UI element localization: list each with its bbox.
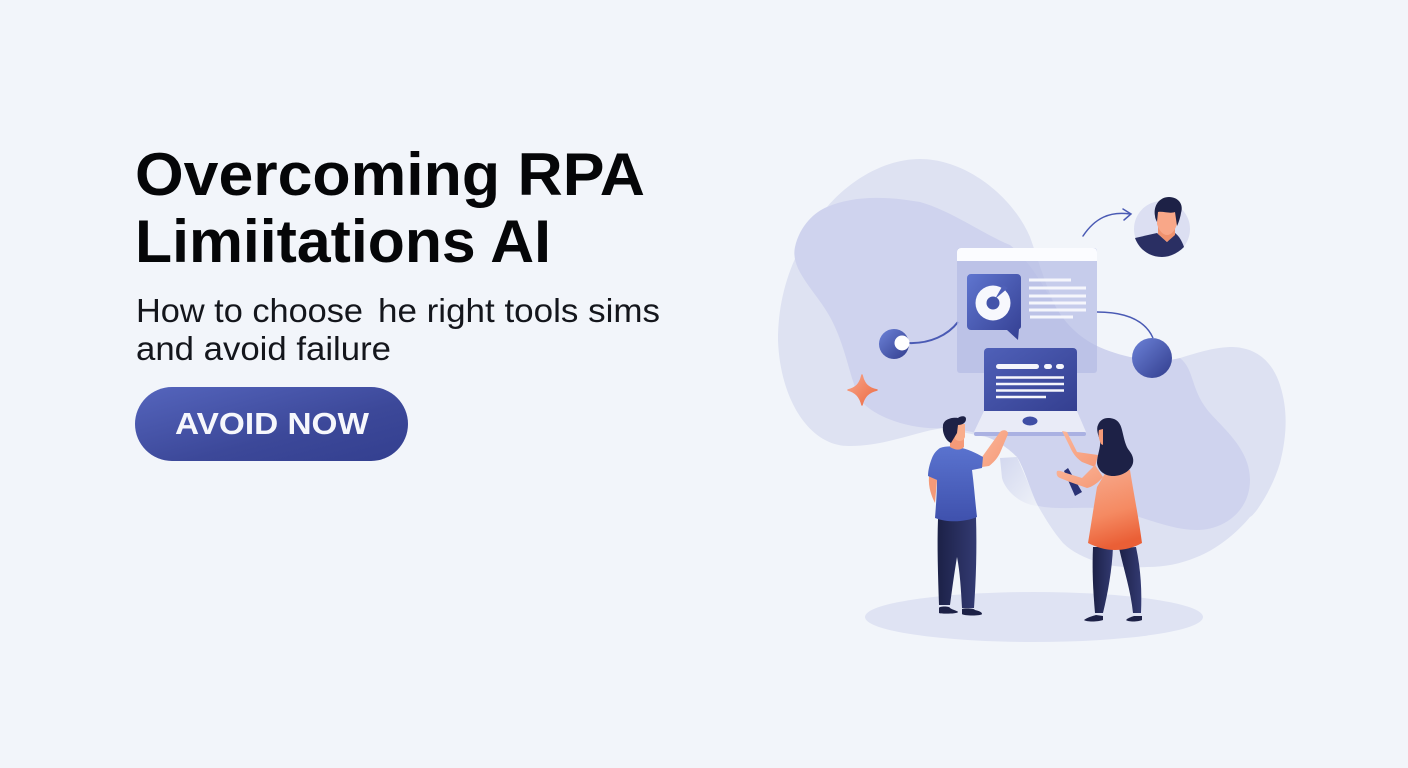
- arrow to avatar: [1083, 209, 1131, 236]
- title: Limiitations AI: [135, 208, 551, 275]
- person: woman: [1057, 418, 1142, 622]
- sparkle: [848, 375, 877, 405]
- title: [135, 141, 645, 275]
- laptop: [974, 348, 1086, 436]
- right connector node: [1097, 312, 1172, 378]
- illustration: [778, 159, 1286, 642]
- subtitle: and avoid failure: [136, 330, 391, 367]
- browser window: [957, 248, 1097, 373]
- left connector node: [879, 322, 958, 359]
- chat bubble icon: [967, 274, 1021, 340]
- subtitle: [136, 292, 660, 367]
- button: avoid now: AVOID NOW: [175, 406, 370, 441]
- button: avoid now: [135, 387, 408, 461]
- window text lines: [1029, 280, 1086, 317]
- background blobs: [778, 159, 1286, 567]
- subtitle: How to choose: [136, 292, 363, 329]
- subtitle: he right tools sims: [378, 292, 660, 329]
- person: man: [928, 416, 1008, 616]
- title: Overcoming RPA: [135, 141, 645, 208]
- avatar: [1134, 197, 1190, 257]
- ground shadow: [865, 592, 1203, 642]
- tablet: [1064, 468, 1082, 496]
